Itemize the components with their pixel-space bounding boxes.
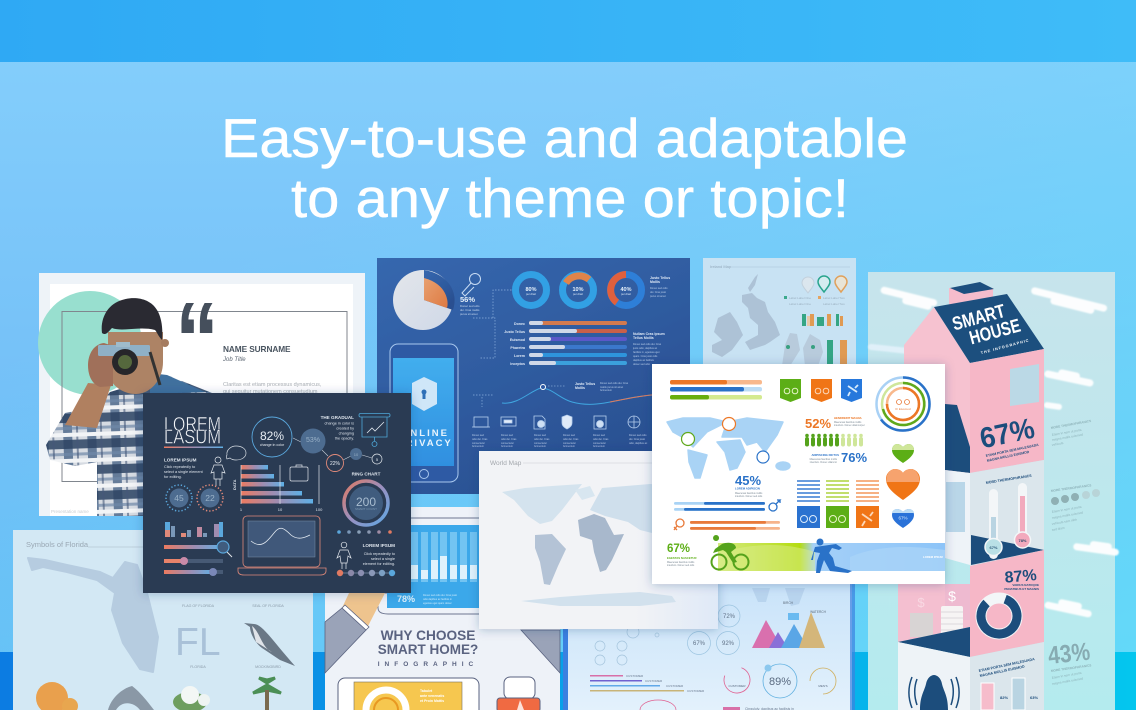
quote mark: “ [175,280,219,399]
ring charts: 10% [572,287,584,293]
tablet chart: odio dapibus ac facilisis in [423,598,453,601]
panel: dark Lorem Lasum infographic [143,393,411,593]
photographer photo [46,298,212,516]
lorem ipsum block: select a single element [164,470,204,474]
roof with title [934,294,1044,363]
labels: FLAG OF FLORIDA [182,604,215,608]
lower walls with bars [898,642,1044,710]
lorem ipsum block [164,458,204,479]
icon row captions: odio, dapibus ac [629,442,648,445]
icon row [472,415,640,429]
pink section: 67% [970,349,1044,473]
labels: FLORIDA [190,665,206,669]
labels: MOCKINGBIRD [255,665,281,669]
panel: symbols of Florida [13,530,313,710]
segment rings: CUSTOMER [728,684,746,688]
horizontal bar chart: DATA [232,479,237,490]
lorem ipsum block: LOREM IPSUM [164,458,197,462]
roof with title: SMART [950,301,1008,335]
panel: world map [479,451,718,629]
heading: SMART HOME? [378,642,478,657]
52% stat: HENDRERIT MAGNA [834,416,862,420]
the gradual note [321,415,354,440]
dark floor [898,627,970,657]
panel: lower right charts: WATERCH [810,610,827,614]
left pink wall with coins: $ [948,588,956,604]
icon: key with 56% [460,274,480,316]
Florida map [28,558,158,672]
icon row captions: fermentum [593,445,605,448]
line chart: Mollis [575,386,585,390]
side text notes: magna mollis euismod [1051,432,1084,442]
chimney [949,282,994,322]
name block: NAME SURNAME [223,344,291,354]
hand [88,343,113,387]
name block: Claritas est etiam processus dynamicus, [223,382,322,388]
line chart: Justo Tellus [575,382,595,386]
82% bubble chain: change in color [260,443,285,447]
bar notes: donec sed odio [633,363,651,366]
world map [667,418,790,478]
side text notes: Etiam in sem ut porta [1051,671,1082,680]
title [221,108,908,229]
dolphin [108,686,154,710]
icon row captions: Donec sed [563,434,576,437]
striped columns [797,480,879,528]
icon row captions: fermentum [472,445,484,448]
lower walls with bars: MAGNA MOLLIS EUISMOD [979,664,1025,678]
ring chart [344,472,388,525]
bar notes: Donec sed odio dui. Cras [633,343,662,346]
icon row captions: Donec sed [501,434,514,437]
icon: key with 56%: dui. Cras mattis [460,308,480,312]
ring chart: RING CHART [352,472,381,476]
small column chart [165,522,223,537]
tablet lower [338,678,479,710]
67% stat: interdum. Donec sed odio [667,564,695,567]
dot chain [337,570,395,576]
ring charts: per chart [621,293,631,296]
ring charts: per chart [526,293,536,296]
82% bubble chain: 10 [354,452,359,457]
orange fruit [36,682,78,710]
plaid shirt [46,375,212,516]
lower walls with bars: 63% [1030,695,1038,700]
heading [378,628,478,668]
76% stat [810,450,867,465]
icon row captions: odio dui. Cras [501,438,517,441]
heading [164,414,221,448]
icon: key with 56%: Donec sed odio [460,304,480,308]
second person note: LOREM IPSUM [363,543,395,548]
panel: lower right charts: BIRCH [783,601,794,605]
title: to any theme or topic! [291,168,849,229]
concentric ring chart: IF Eiusmod [895,407,911,411]
title: Easy-to-use and adaptable [221,108,908,169]
icon: speech bubble [226,446,246,460]
top band [0,0,1136,62]
heading: LASUM [164,426,221,448]
icon bars [786,314,847,366]
heading: WHY CHOOSE [381,628,475,643]
name block: qui sequitur mutationem consuetudium [223,389,318,395]
tablet lower: et Proin Mattis [420,699,444,703]
82% bubble chain: 22% [330,461,341,467]
icon row captions: Donec sed [534,434,547,437]
roof with title: HOUSE [967,316,1023,349]
gender bars [674,502,780,530]
segment rings: 89% [769,676,791,688]
ring notes: purus sit amet [650,295,666,298]
side text notes: 43% [1047,638,1091,670]
45% stat: 45% [735,473,761,488]
multi-bar list: CUSTOMER [626,674,644,678]
dot legend [337,530,392,534]
line chart [502,382,668,404]
side text notes: magna mollis euismod [1051,676,1084,686]
name block: Job Title [222,357,246,363]
82% bubble chain: 82% [260,429,284,443]
hearts: 67% [898,516,908,520]
the gradual note: changing [339,432,354,436]
panel: quote card with photographer: Presentation name [51,509,89,514]
icon: person [211,457,225,486]
icon: female [674,519,684,530]
ring charts [516,274,642,306]
icon: cyclist [712,535,748,570]
second person note: select a single [371,557,395,561]
horizontal bar chart [232,465,323,512]
icon: male [769,500,780,511]
ring notes: dui. Cras justo [650,291,667,294]
line chart: Donec sed odio dui. Cras [600,382,629,385]
dotted rings: 45 [174,493,184,503]
52% stat: interdum. Donec ullamcorper [834,424,865,427]
map continents [502,484,718,606]
heading: INFOGRAPHIC [378,661,478,668]
67% stat: 67% [667,543,690,555]
icon row captions: odio dui. Cras [563,438,579,441]
forearm [65,383,111,428]
concentric ring chart [876,378,930,431]
map of British Isles [712,274,823,366]
side text notes: vehicula sem nibh [1051,518,1078,526]
pink section: 67%: ETIAM PORTA SEM MALESUADA [985,443,1039,458]
progress bars [670,380,762,400]
multi-bar list: CUSTOMER [666,684,684,688]
tablet lower: Tabulet [420,689,433,693]
smart watch [497,677,540,710]
hand and sleeves [325,593,560,673]
grey section: thermometers: MORD THERMOPHRANICS [986,474,1033,485]
dotted rings [166,485,223,511]
side text notes: MORE THERMOPHRANICS [1050,419,1091,430]
icon row captions: odio dui. Cras [593,438,609,441]
side text notes: vehicula [1051,441,1064,447]
second person note [337,542,395,569]
76% stat: ADIPISCING DICTUS [811,453,839,457]
bar notes: quam. Cras justo odio [633,355,658,358]
horizontal bar chart: 1 [240,507,243,512]
percentage rings: 92% [722,641,735,647]
bar chart: Euismod [510,338,525,342]
icon row captions: fermentum [501,445,513,448]
left pink wall with coins [898,584,970,646]
pink section: 87% ring: VARIUS NATOQUE [1012,583,1039,587]
side text notes: MORE THERMOPHRANICS [1051,483,1092,493]
panel: quote card with photographer [38,273,365,516]
small rings [595,626,659,665]
palm [253,678,281,710]
45% stat: Maecenas faucibus mollis [735,492,763,495]
icon row captions: consectetur [563,442,576,445]
multi-bar list: CUSTOMER [687,689,705,693]
tablet lower: ante venenatis [420,694,444,698]
grey section: thermometers: 67% [989,545,998,550]
icon row captions: consectetur [534,442,547,445]
icon row captions: dui. Cras justo [629,438,646,441]
pink section: 67%: 67% [977,413,1038,455]
line chart: mattis purus sit amet [600,386,623,389]
bottom row [640,700,794,710]
second person note: Click repeatedly to [364,552,395,556]
panel: why choose smart home [325,507,560,710]
side text notes: magna mollis euismod [1051,510,1084,520]
camera [98,342,150,375]
pink section: 87% ring [970,550,1044,657]
triangle chart [752,612,825,648]
tablet chart: Donec sed odio dui. Cras justo [423,594,458,597]
icon row captions: Donec sed odio [629,434,647,437]
icon row captions [472,434,648,448]
pink section: 67%: MAGNA MOLLIS EUISMOD [986,450,1030,463]
phone with online privacy [390,344,458,482]
bar notes [632,332,665,366]
pink section: 87% ring: 87% [1004,567,1037,587]
the gradual note: THE GRADUAL [321,415,354,420]
bar notes: Tellus Mollis [633,336,654,340]
icon: key with 56%: 56% [460,295,475,304]
icon row captions: consectetur [593,442,606,445]
bar notes: dapibus ac facilisis [633,359,655,362]
multi-bar list [590,674,705,693]
panel: sports infographic [652,364,945,584]
legend: Label Label Two [823,296,845,300]
ring charts: 40% [620,287,632,293]
icon: key with 56%: purus sit amet [460,312,478,316]
tablet chart [378,518,498,614]
legend: Label Label One [789,302,811,306]
67% stat: Maecenas faucibus mollis [667,561,695,564]
45% stat [735,473,763,498]
icon: briefcase [290,465,308,481]
grey section: thermometers [970,460,1044,566]
percentage rings: 67% [693,641,706,647]
heading: LOREM [164,414,221,436]
hearts [886,444,920,528]
panel: symbols of Florida: Symbols of Florida [26,540,89,549]
band with athletes: LOREM IPSUM [923,555,943,559]
side text notes: Etiam in sem ut porta [1051,428,1082,437]
pie chart [393,270,455,330]
labels [182,604,284,669]
67% stat: EGESTAS NASCETUR [667,556,696,560]
icon row captions: consectetur [472,442,485,445]
percentage rings [688,605,740,654]
legend: Label Label One [789,296,811,300]
lorem ipsum block: for editing. [164,475,182,479]
52% stat: 52% [805,416,831,431]
panel: online privacy infographic [377,258,690,494]
icon row captions: odio dui. Cras [534,438,550,441]
67% stat [667,543,696,567]
band with athletes [712,535,945,573]
bar chart: Donec [514,322,525,326]
slider controls [164,541,232,576]
panel: smart house infographic [868,272,1119,710]
left house wall [904,307,970,480]
panel: Ireland map infographic [703,258,856,366]
icon row captions: consectetur [501,442,514,445]
76% stat: interdum. Donec ullamcor [810,461,837,464]
ring notes: Mollis [650,280,660,284]
name block [222,344,322,395]
icon: runner [811,538,852,573]
ring notes: Justo Tellus [650,276,670,280]
icon row captions: Donec sed [593,434,606,437]
bar chart: Pharetra [510,346,526,350]
faint map [752,588,805,606]
legend [784,296,845,306]
multi-bar list: CUSTOMER [645,679,663,683]
horizontal bar chart: 100 [316,507,323,512]
dotted rings: 22 [205,493,215,503]
line chart: fermentum [600,389,612,392]
map markers [682,418,769,463]
flower [173,686,210,710]
bar notes: justo odio, dapibus ac [632,347,658,350]
82% bubble chain: 5 [376,457,379,462]
the gradual note: created by [336,426,354,430]
side text notes: sed diam [1051,526,1065,532]
phone with online privacy: PRIVACY [397,438,453,449]
lower walls with bars: ETIAM PORTA SEM MALESUADA [978,657,1035,673]
flag icons [780,379,862,402]
grey section: thermometers: 78% [1018,538,1027,543]
lower walls with bars: 82% [1000,695,1008,700]
roof with title: THE INFOGRAPHIC [980,338,1030,355]
segment rings: MEN'S [818,684,828,688]
icon: presentation board [359,414,390,446]
bar notes: facilisis in, egestas eget [633,351,660,354]
side text notes [1047,419,1100,686]
laptop [238,516,326,575]
ring chart: SMART COUNT [355,507,377,511]
icon row captions: fermentum [534,445,546,448]
82% bubble chain [252,417,382,472]
panel: Ireland map infographic: Ireland Map [710,264,732,269]
bar chart: Justo Tellus [504,330,525,334]
side text notes: MORE THERMOPHRANICS [1051,663,1092,673]
hair [102,298,162,340]
icon row captions: Donec sed [472,434,485,437]
legend: Label Label Two [823,302,845,306]
percentage rings: 72% [723,614,736,620]
icon: shield [412,377,437,411]
52% stat [805,416,865,431]
ring notes: Donec sed odio [650,287,668,290]
52% stat: Maecenas faucibus mollis [834,421,862,424]
bird [244,623,295,666]
bar chart: Lorem [514,354,525,358]
labels: SEAL OF FLORIDA [252,604,284,608]
76% stat: 76% [841,450,867,465]
left pink wall with coins: $ [917,595,925,610]
panel: world map: World Map [490,460,522,467]
side text notes: Etiam in sem ut porta [1051,505,1082,514]
second person note: element for editing. [363,562,395,566]
ring chart: 200 [356,495,376,509]
people row [805,434,863,446]
lorem ipsum block: Click repeatedly to [164,465,195,469]
clouds [868,286,1119,618]
icon row captions: odio dui. Cras [472,438,488,441]
ring charts: per chart [573,293,583,296]
icon: woman silhouette [909,675,959,710]
FL monogram: FL [175,621,221,664]
icon row captions: fermentum [563,445,575,448]
45% stat: interdum. Donec sed odio [735,495,763,498]
tablet chart: 78% [397,594,415,604]
horizontal bar chart: 10 [278,507,283,512]
bar chart [504,321,627,366]
45% stat: LOREM ADIPISCIN [735,486,760,490]
ring notes [650,276,670,298]
82% bubble chain: 53% [306,437,320,444]
tablet chart: egestas eget quam donec [423,602,453,605]
the gradual note: the opacity. [335,436,354,440]
segment rings [720,663,836,698]
panel: lower right charts [563,584,855,710]
the gradual note: change in color is [324,422,354,426]
bar chart: Inceptos [510,362,525,366]
face and neck [108,332,163,394]
bar notes: Nullam Cras Ipsum [633,332,665,336]
phone with online privacy: ONLINE [401,428,449,439]
76% stat: Maecenas faucibus mollis [810,458,838,461]
pink section: 87% ring: PENATIBUS ET MAGNIS [1004,587,1039,591]
decorative dashes [473,290,517,407]
ring charts: 80% [525,287,537,293]
map pins [802,276,847,293]
